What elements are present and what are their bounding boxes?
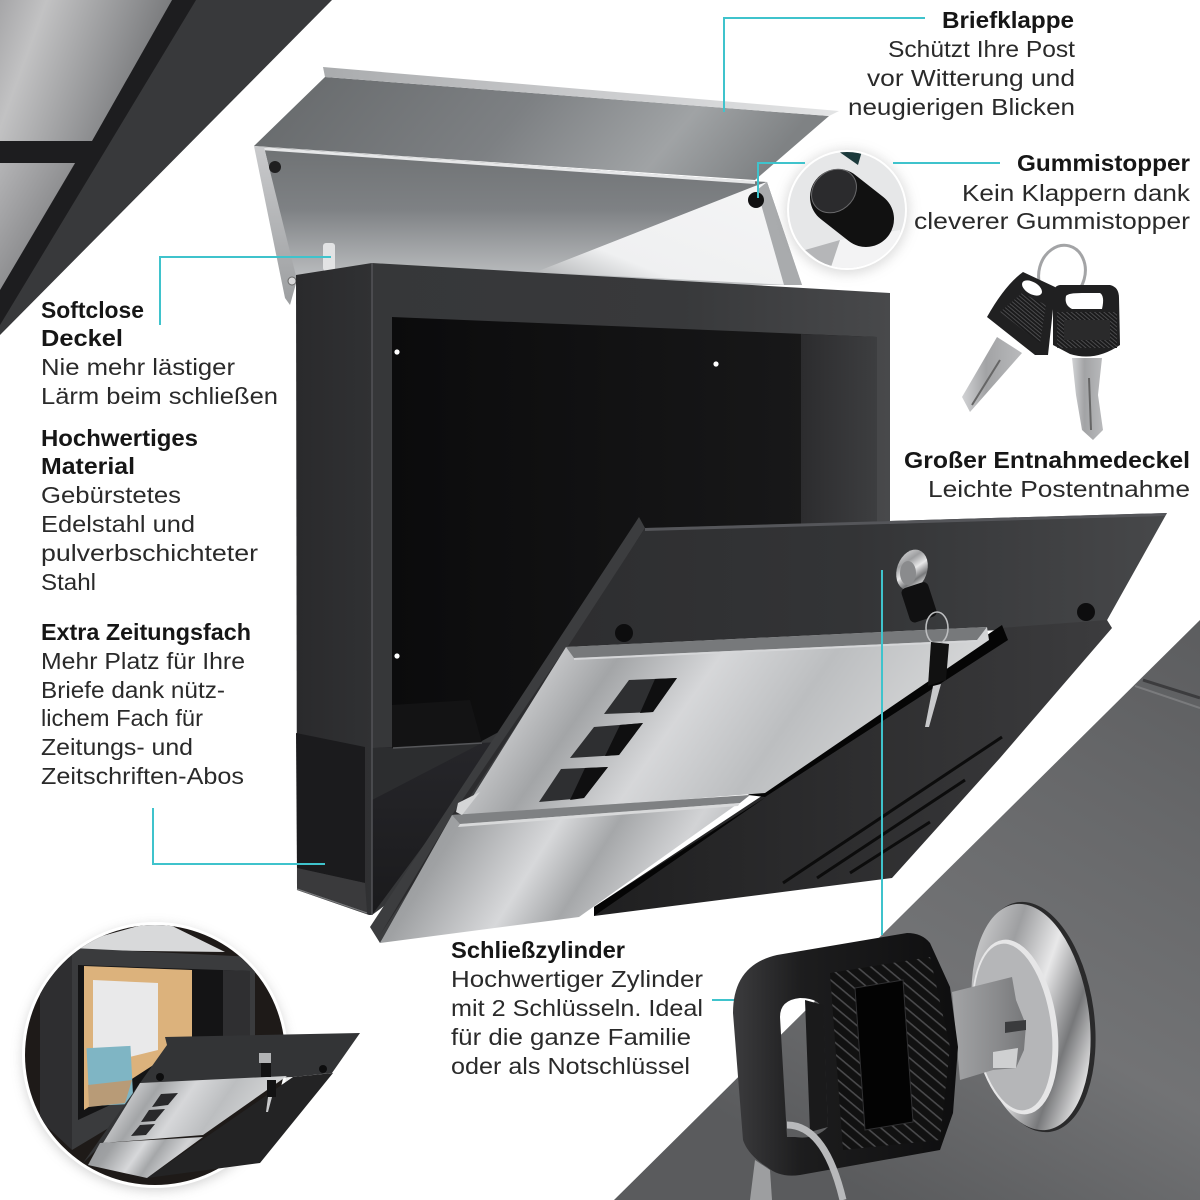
lock ring [958, 894, 1110, 1140]
text: Gummistopper: Gummistopper [1017, 150, 1190, 176]
text: Großer Entnahmedeckel [904, 447, 1190, 502]
key ring [787, 1125, 843, 1200]
rubber stopper right [748, 192, 764, 208]
text: Schließzylinder: oder als Notschlüssel [451, 1053, 690, 1079]
text: Extra Zeitungsfach: Zeitschriften-Abos [41, 763, 244, 789]
corner panel: brushed steel and anthracite detail [0, 0, 332, 335]
text: Schließzylinder: mit 2 Schlüsseln. Ideal [451, 995, 703, 1021]
key blade [952, 977, 1026, 1080]
front plate [594, 620, 1112, 916]
text: Extra Zeitungsfach: Extra Zeitungsfach [41, 619, 251, 645]
text: Hochwertiges Material: Edelstahl und [41, 511, 195, 537]
text: Extra Zeitungsfach: Zeitungs- und [41, 734, 193, 760]
door lock with small key [891, 545, 949, 727]
key blades [962, 337, 1103, 440]
text: Gummistopper [914, 150, 1191, 234]
text: Großer Entnahmedeckel: Leichte Postentnahme [928, 476, 1190, 502]
key head [733, 933, 958, 1176]
lower steel panel [380, 795, 750, 943]
upper steel panel [460, 627, 989, 817]
text: Schließzylinder: Hochwertiger Zylinder [451, 966, 703, 992]
slots in plate [783, 737, 1002, 883]
right key head [1053, 285, 1120, 357]
opened door [370, 513, 1167, 943]
small door [83, 1033, 360, 1178]
text: Schließzylinder [451, 937, 703, 1079]
inspection windows [539, 678, 677, 802]
text: Briefklappe [848, 7, 1076, 120]
text: Briefklappe: Schützt Ihre Post [888, 36, 1076, 62]
text: Hochwertiges Material: Hochwertiges [41, 425, 198, 451]
rubber stopper left [269, 161, 281, 173]
text: Hochwertiges Material: Stahl [41, 569, 96, 595]
door stoppers [615, 603, 1095, 642]
text: Hochwertiges Material: pulverbschichteter [41, 540, 258, 566]
text: Extra Zeitungsfach: Briefe dank nütz- [41, 677, 225, 703]
soft-close pin [323, 243, 335, 271]
second key peeking [750, 1160, 772, 1200]
text: Softclose Deckel: Deckel [41, 325, 123, 351]
left key head [987, 272, 1056, 355]
text: Briefklappe: neugierigen Blicken [848, 94, 1075, 120]
key ring [1033, 240, 1091, 306]
panel: textured grey close-up background [614, 620, 1200, 1200]
text: Hochwertiges Material: Material [41, 453, 135, 479]
key hole wall [805, 1000, 828, 1132]
text: Großer Entnahmedeckel: Großer Entnahmedeckel [904, 447, 1190, 473]
text: Gummistopper: Kein Klappern dank [962, 180, 1191, 206]
mailbox body [296, 263, 890, 915]
text: Softclose Deckel: Softclose [41, 297, 144, 323]
text: Softclose Deckel [41, 297, 278, 409]
leader lines [153, 18, 1000, 1000]
text: Extra Zeitungsfach: Mehr Platz für Ihre [41, 648, 245, 674]
text: Extra Zeitungsfach: lichem Fach für [41, 705, 203, 731]
text: Extra Zeitungsfach [41, 619, 251, 789]
text: Schließzylinder: für die ganze Familie [451, 1024, 691, 1050]
text: Softclose Deckel: Lärm beim schließen [41, 383, 278, 409]
hatched grip [830, 957, 950, 1150]
text: Hochwertiges Material [41, 425, 258, 595]
text: Briefklappe: vor Witterung und [867, 65, 1075, 91]
key label [855, 980, 913, 1130]
text: Hochwertiges Material: Gebürstetes [41, 482, 181, 508]
close-up: lock cylinder and key [733, 894, 1110, 1200]
text: Schließzylinder: Schließzylinder [451, 937, 625, 963]
inset: mailbox filled with post [20, 920, 360, 1190]
text: Gummistopper: cleverer Gummistopper [914, 208, 1190, 234]
icon: two keys on a ring [962, 240, 1120, 440]
inset: rubber stopper close-up [785, 150, 909, 274]
text: Softclose Deckel: Nie mehr lästiger [41, 354, 235, 380]
mailbox lid [254, 67, 839, 305]
text: Briefklappe: Briefklappe [942, 7, 1074, 33]
